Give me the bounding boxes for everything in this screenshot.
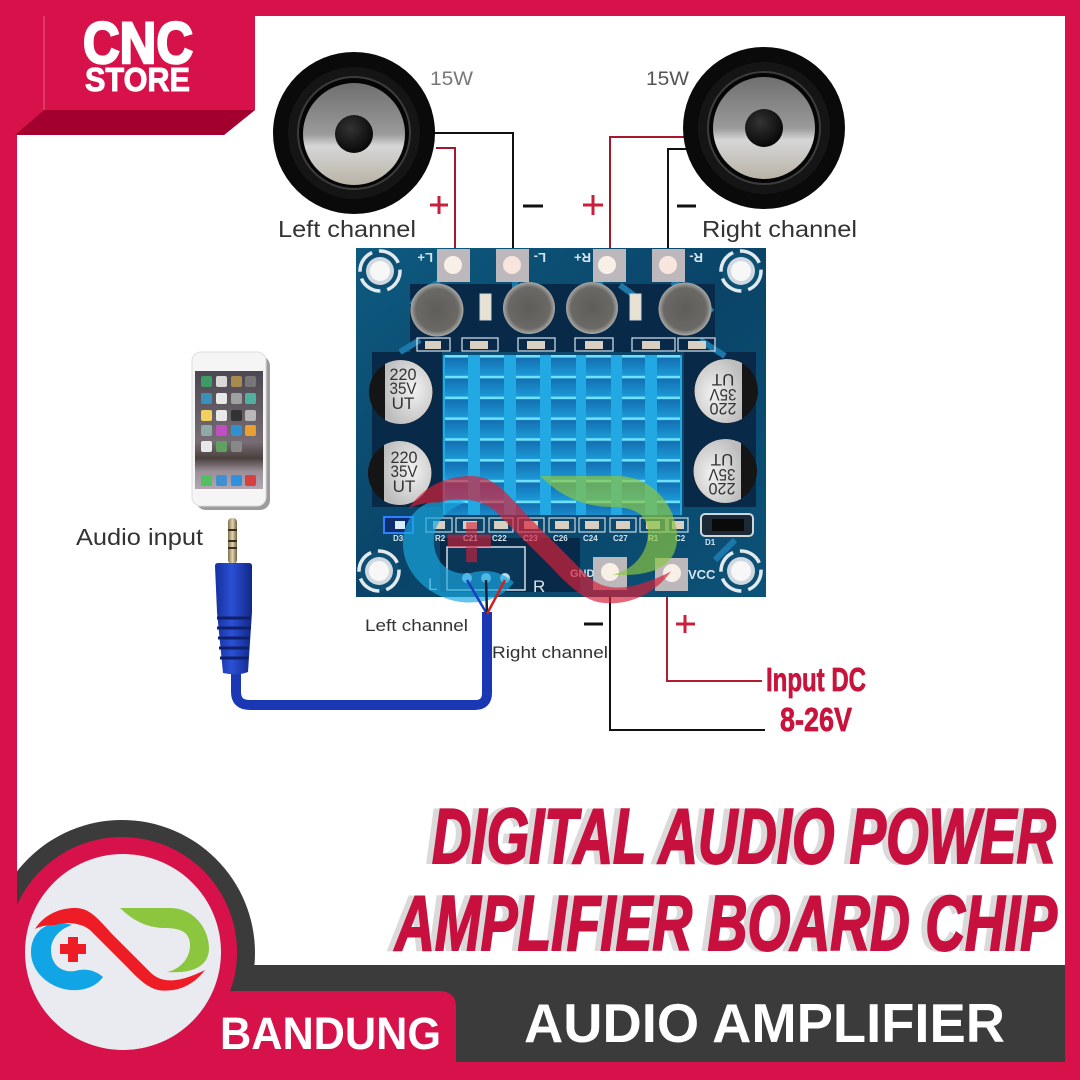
mounting holes (359, 251, 761, 591)
input voltage label: Input DC (766, 661, 866, 698)
left speaker (273, 52, 435, 214)
polarity marks (430, 195, 696, 633)
bottom band (0, 815, 1080, 1080)
silkscreen labels: C21 (463, 534, 478, 543)
brand name: STORE (85, 61, 190, 98)
logo (31, 908, 209, 991)
silkscreen labels: C27 (613, 534, 628, 543)
input voltage label: 8-26V (780, 701, 852, 738)
speaker wires (433, 133, 765, 730)
silkscreen labels: R (533, 577, 545, 596)
electrolytic capacitors: 220 (390, 365, 416, 384)
crimson lower block (17, 905, 1080, 1080)
board base (356, 248, 766, 597)
brand tab (0, 0, 255, 900)
speaker labels: Left channel (278, 216, 416, 242)
audio input label: Audio input (76, 524, 204, 550)
silkscreen labels: L- (534, 250, 546, 265)
city label: BANDUNG (220, 1008, 441, 1059)
electrolytic capacitors: 220 (390, 448, 418, 467)
brand name: CNC (83, 11, 193, 76)
speaker labels: 15W (430, 69, 473, 90)
speaker labels: 15W (646, 69, 689, 90)
silkscreen labels: R2 (435, 534, 446, 543)
electrolytic capacitors: 220 (710, 399, 736, 418)
silkscreen labels: C26 (553, 534, 568, 543)
audio jack and cable (215, 518, 505, 705)
electrolytic capacitors: 35V (708, 465, 736, 484)
silkscreen labels: L+ (417, 250, 433, 265)
silkscreen labels (393, 250, 716, 596)
silkscreen labels: D1 (705, 538, 716, 547)
brand name (83, 11, 193, 98)
electrolytic capacitors: UT (393, 477, 415, 496)
lower SMD row (384, 514, 753, 536)
input connector (447, 547, 525, 590)
input cable labels (365, 616, 608, 662)
metal plug (228, 518, 237, 564)
right speaker (683, 47, 845, 209)
amplifier board (356, 248, 766, 603)
logo disc (25, 854, 221, 1050)
dark copper zones (372, 284, 756, 592)
input cable labels: Left channel (365, 616, 468, 635)
silkscreen labels: C23 (523, 534, 538, 543)
tab fold line (43, 16, 45, 110)
heat sink (443, 355, 682, 515)
electrolytic capacitors: UT (711, 450, 733, 469)
wiring diagram (430, 133, 765, 730)
input voltage label (766, 661, 866, 738)
phone (192, 352, 270, 510)
silkscreen labels: GND (570, 568, 594, 580)
silkscreen labels: R- (689, 250, 703, 265)
category label: AUDIO AMPLIFIER (524, 992, 1005, 1054)
upper SMD row (417, 338, 715, 351)
silkscreen labels: C24 (583, 534, 598, 543)
silkscreen labels: VCC (688, 567, 716, 582)
tab shadow (15, 110, 255, 135)
speaker labels (278, 69, 857, 242)
dark arc (0, 820, 255, 1080)
cable (236, 612, 487, 705)
electrolytic capacitors (368, 359, 758, 505)
product title (388, 792, 1058, 967)
input cable labels: Right channel (492, 643, 608, 662)
output and power terminals (437, 249, 688, 591)
watermark logo (403, 476, 677, 603)
electrolytic capacitors: 35V (390, 462, 418, 481)
left frame cover (0, 815, 17, 1080)
silkscreen labels: D3 (393, 534, 404, 543)
silkscreen labels: R1 (648, 534, 659, 543)
silkscreen labels: L (428, 575, 437, 594)
silkscreen labels: C22 (492, 534, 507, 543)
electrolytic capacitors: UT (392, 394, 414, 413)
electrolytic capacitors: 35V (390, 379, 417, 398)
connector wires (467, 580, 505, 614)
plug body (215, 563, 252, 674)
copper traces (400, 282, 735, 560)
electrolytic capacitors: UT (712, 370, 734, 389)
silkscreen labels: R+ (574, 250, 591, 265)
crimson ring (7, 837, 237, 1067)
electrolytic capacitors: 220 (708, 479, 736, 498)
small capacitors (410, 282, 712, 336)
speaker labels: Right channel (702, 216, 857, 242)
strain relief ribs (217, 618, 251, 658)
electrolytic capacitors: 35V (709, 385, 736, 404)
silkscreen labels: C2 (675, 534, 686, 543)
